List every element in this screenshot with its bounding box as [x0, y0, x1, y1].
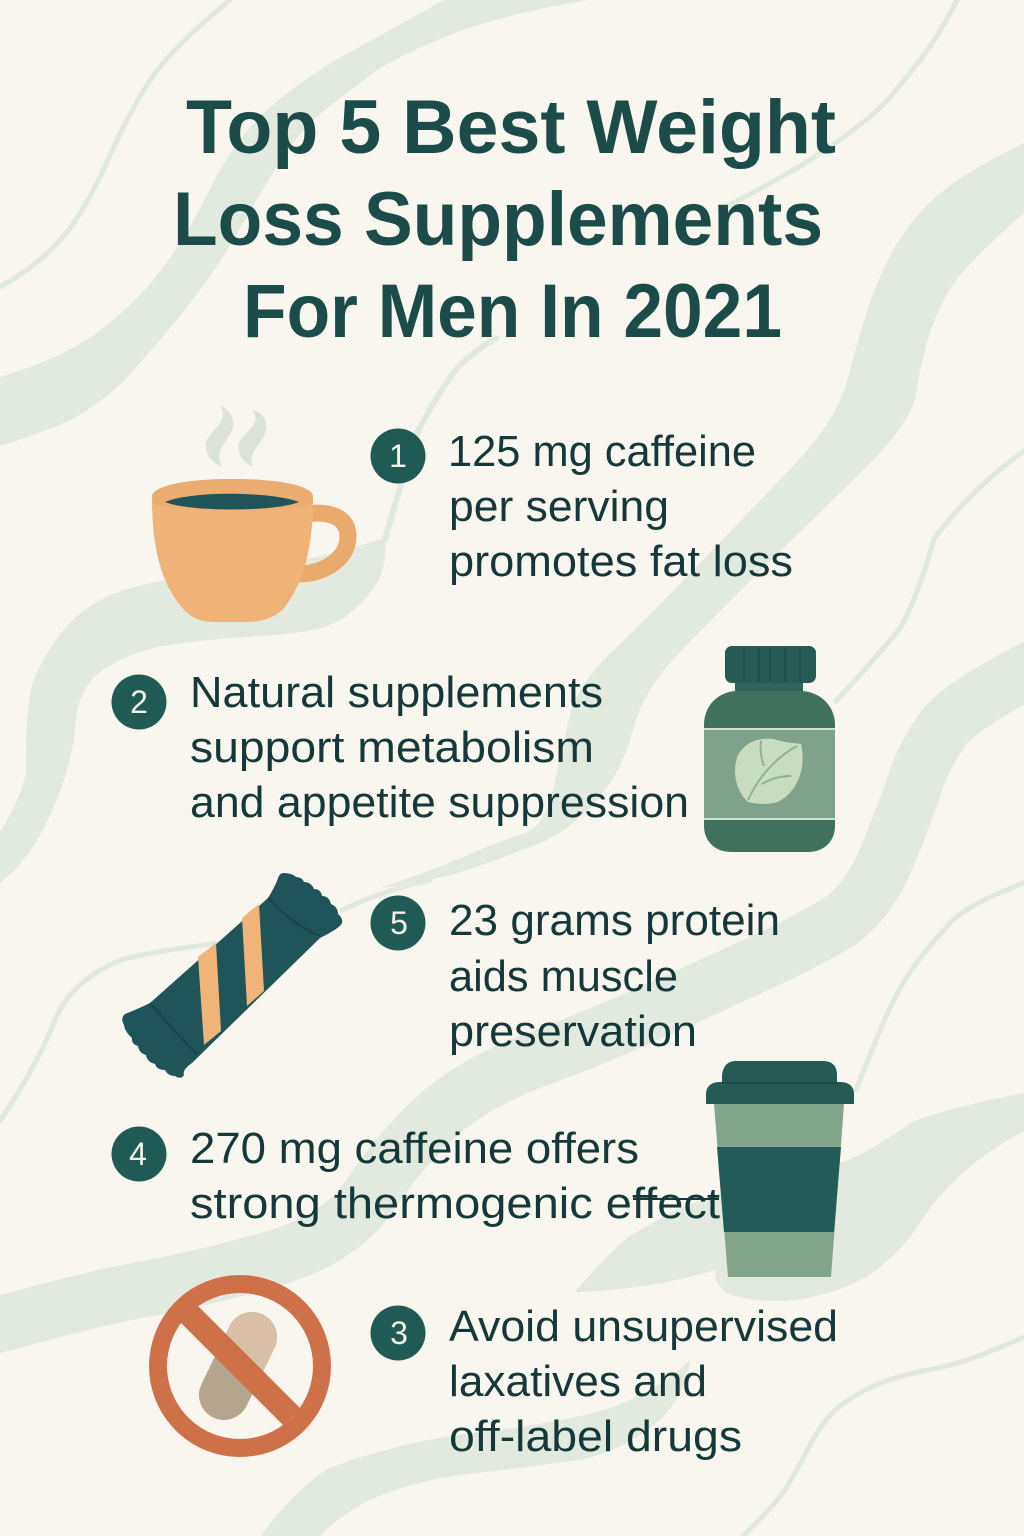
item 5: [370, 896, 780, 1056]
item 1: promotes fat loss: [449, 537, 793, 586]
item 2: 2: [130, 684, 148, 720]
item 5: 5: [390, 905, 408, 941]
title: For Men In 2021: [243, 269, 782, 354]
item 4: [112, 1124, 720, 1228]
item 3: 3: [390, 1315, 408, 1351]
item 1: per serving: [449, 482, 669, 531]
item 4: 4: [129, 1136, 147, 1172]
item 2: Natural supplements: [190, 668, 603, 717]
item 1: 125 mg caffeine: [448, 427, 756, 476]
title: [173, 85, 836, 354]
item 4: strong thermogenic effect: [190, 1179, 720, 1228]
icon: coffee cup: [152, 405, 348, 622]
item 1: [370, 427, 793, 586]
item 5: preservation: [449, 1007, 697, 1056]
icon: no pills sign: [158, 1284, 322, 1448]
item 2: [112, 668, 689, 827]
title: Top 5 Best Weight: [186, 85, 836, 170]
item 2: support metabolism: [190, 723, 594, 772]
icon: supplement bottle: [704, 646, 835, 852]
item 1: 1: [389, 438, 407, 474]
item 5: 23 grams protein: [449, 896, 780, 945]
icon: protein bar: [122, 873, 342, 1078]
item 3: [370, 1302, 838, 1461]
item 2: and appetite suppression: [190, 778, 689, 827]
item 3: off-label drugs: [449, 1412, 742, 1461]
item 3: laxatives and: [449, 1357, 707, 1406]
icon: takeaway cup: [706, 1061, 854, 1277]
title: Loss Supplements: [173, 177, 823, 262]
item 3: Avoid unsupervised: [449, 1302, 838, 1351]
item 5: aids muscle: [449, 952, 678, 1001]
item 4: 270 mg caffeine offers: [190, 1124, 639, 1173]
